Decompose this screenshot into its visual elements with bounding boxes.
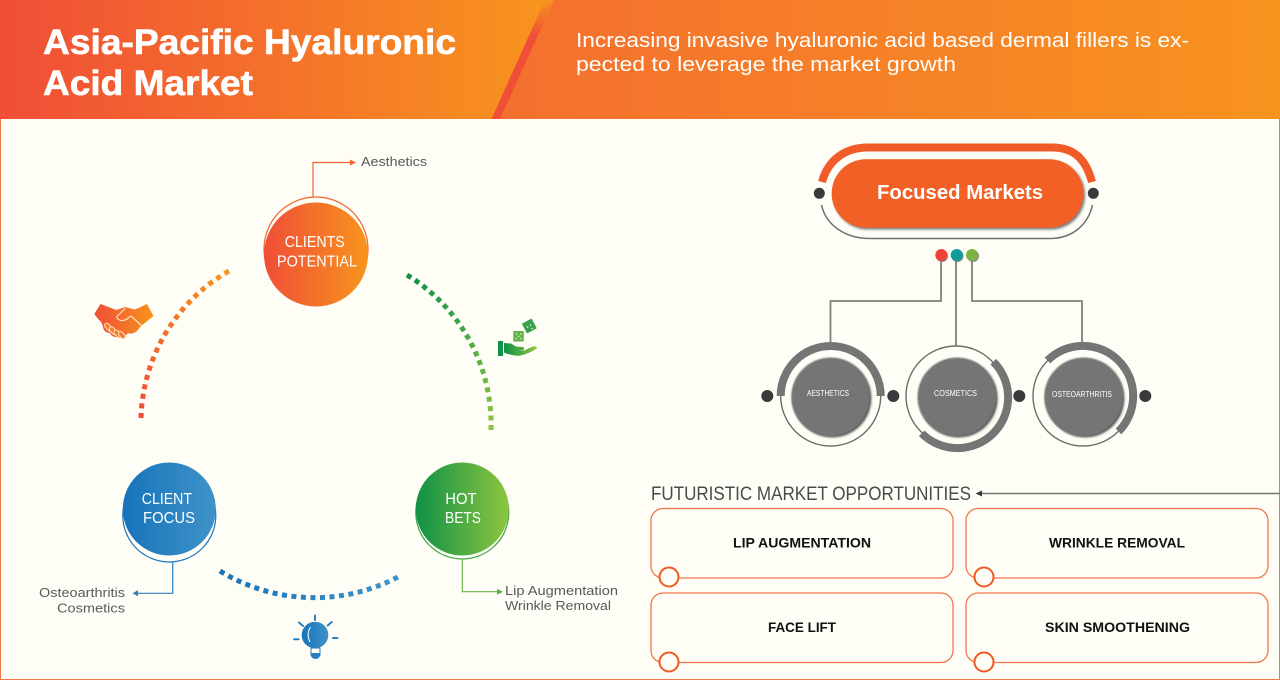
connector dots <box>935 249 979 262</box>
market circle: aesthetics <box>781 346 881 446</box>
header subtitle: pected to leverage the market growth <box>576 54 956 76</box>
node: hot bets <box>416 462 509 559</box>
arrow into heading <box>976 490 1280 496</box>
header banner <box>0 0 1280 119</box>
market circle: cosmetics: COSMETICS <box>934 389 977 398</box>
connector: client focus to labels <box>132 562 173 596</box>
title: Acid Market <box>43 64 253 103</box>
arc: green dotted <box>407 275 491 430</box>
card: lip augmentation <box>651 508 953 586</box>
card: wrinkle removal: WRINKLE REMOVAL <box>1049 534 1185 550</box>
market circle side dots <box>761 390 1151 402</box>
connector: clients potential to aesthetics <box>313 160 356 197</box>
node: hot bets: BETS <box>445 510 481 527</box>
card: skin smoothening: SKIN SMOOTHENING <box>1045 619 1190 635</box>
arc: blue dotted <box>220 571 398 598</box>
market circle: osteoarthritis <box>1033 346 1133 446</box>
node: clients potential: CLIENTS <box>285 234 345 251</box>
label: aesthetics: Aesthetics <box>361 154 428 169</box>
focused markets frame <box>814 148 1099 238</box>
label: lip augmentation and wrinkle removal: Lip Augmentation <box>505 583 618 598</box>
focused markets heading pill: Focused Markets <box>877 182 1043 204</box>
heading: futuristic market opportunities: FUTURISTIC MARKET OPPORTUNITIES <box>651 484 971 505</box>
arc: orange dotted <box>141 271 229 418</box>
card: face lift <box>651 593 953 672</box>
market circle: osteoarthritis: OSTEOARTHRITIS <box>1052 390 1112 399</box>
node: client focus: FOCUS <box>143 510 195 527</box>
label: osteoarthritis and cosmetics: Osteoarthritis <box>39 585 126 600</box>
node: hot bets: HOT <box>445 491 477 508</box>
card: lip augmentation: LIP AUGMENTATION <box>733 534 871 550</box>
title: Asia-Pacific Hyaluronic <box>43 23 456 62</box>
node: client focus: CLIENT <box>142 491 192 508</box>
header subtitle: Increasing invasive hyaluronic acid based dermal fillers is ex- <box>576 30 1189 52</box>
icon: light bulb <box>294 616 338 659</box>
label: osteoarthritis and cosmetics: Cosmetics <box>57 600 126 615</box>
label: lip augmentation and wrinkle removal: Wrinkle Removal <box>505 598 611 613</box>
focused markets heading pill <box>832 159 1085 230</box>
market circle: aesthetics: AESTHETICS <box>807 389 849 398</box>
node: clients potential <box>264 197 368 306</box>
icon: handshake <box>94 304 154 340</box>
connector: hot bets to labels <box>462 559 503 595</box>
node: client focus <box>123 462 216 562</box>
market circle: cosmetics <box>906 346 1008 448</box>
card: wrinkle removal <box>966 508 1268 586</box>
card: face lift: FACE LIFT <box>768 619 836 635</box>
card: skin smoothening <box>966 593 1268 672</box>
icon: hand with dice <box>498 319 537 356</box>
node: clients potential: POTENTIAL <box>277 254 357 270</box>
connector lines to market circles <box>830 261 1082 346</box>
